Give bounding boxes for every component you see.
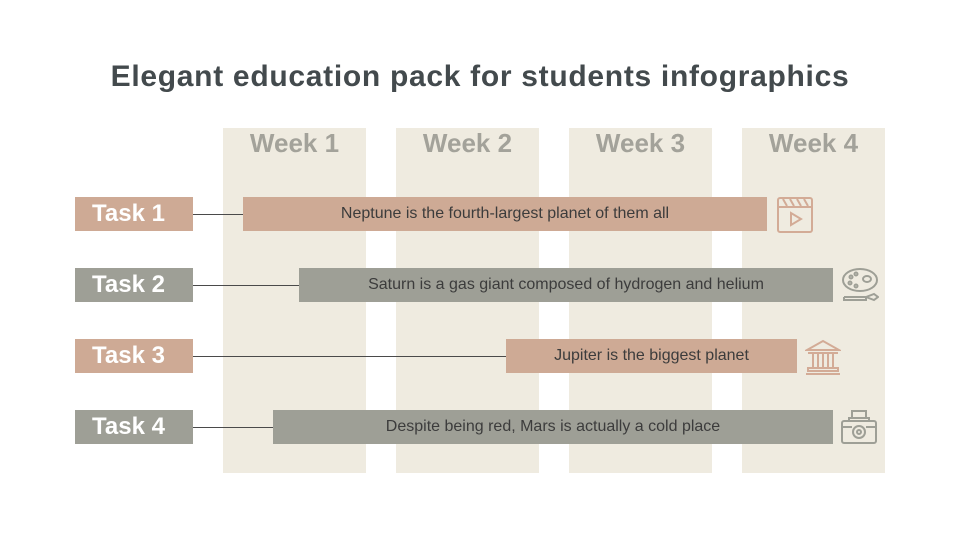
connector 3 [193,356,506,357]
bar 2 [299,268,833,302]
week 3 label: Week 3 [596,128,685,158]
bar 1: Neptune is the fourth-largest planet of them all [341,205,669,222]
task 1 label: Task 1 [92,200,165,227]
task 4 label [75,410,193,444]
task 2 label [75,268,193,302]
bar 3: Jupiter is the biggest planet [554,347,749,364]
bar 1 [243,197,767,231]
column: week 3 [569,128,712,473]
task 3 label [75,339,193,373]
task 1 label [75,197,193,231]
bar 2: Saturn is a gas giant composed of hydrogen and helium [368,276,764,293]
connector 4 [193,427,273,428]
connector 1 [193,214,243,215]
icon: palette [842,268,879,302]
bar 3 [506,339,797,373]
icon: clapperboard [777,197,813,233]
icon: camera [841,410,877,444]
column: week 2 [396,128,539,473]
bar 4: Despite being red, Mars is actually a cold place [386,418,720,435]
task 2 label: Task 2 [92,271,165,298]
title: Elegant education pack for students infographics [111,60,849,93]
connector 2 [193,285,299,286]
bar 4 [273,410,833,444]
week 4 label: Week 4 [769,128,858,158]
week 2 label: Week 2 [423,128,512,158]
column: week 4 [742,128,885,473]
task 4 label: Task 4 [92,413,165,440]
task 3 label: Task 3 [92,342,165,369]
week 1 label: Week 1 [250,128,339,158]
column: week 1 [223,128,366,473]
icon: museum [805,340,841,375]
